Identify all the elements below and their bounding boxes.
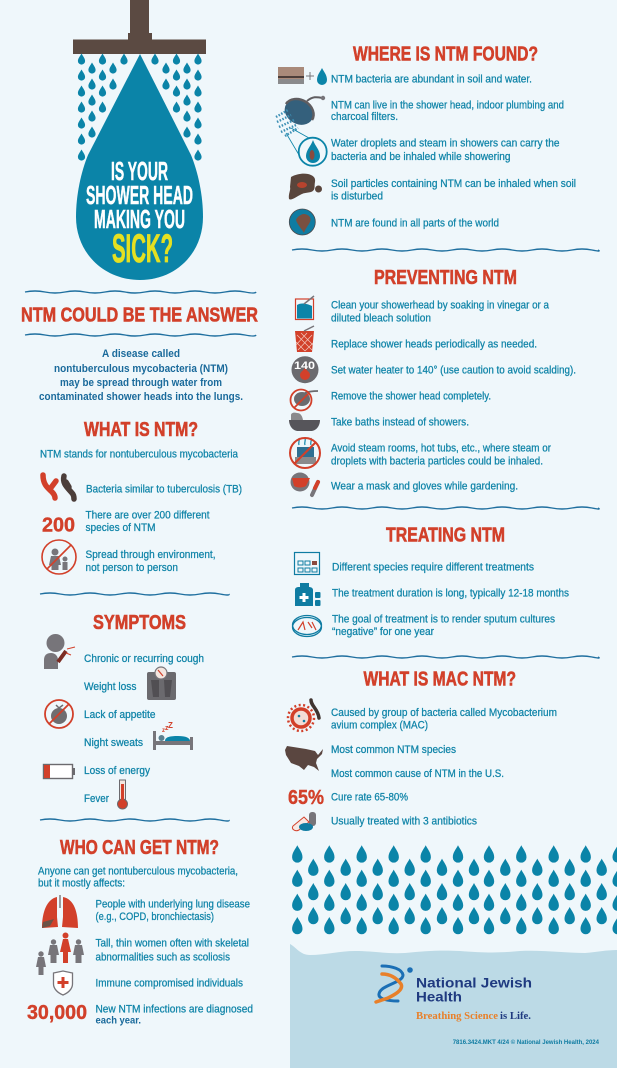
text block: intro: may be spread through water from xyxy=(60,377,222,389)
footer panel xyxy=(290,944,617,1068)
text: tall thin women xyxy=(96,938,249,964)
text: caused by: avium complex (MAC) xyxy=(331,720,428,732)
heading: PREVENTING NTM xyxy=(374,267,517,289)
text: species: Most common NTM species xyxy=(331,744,456,756)
text: bacteria similar: Bacteria similar to tuberculosis (TB) xyxy=(86,484,242,496)
text: spread through environment xyxy=(86,549,216,574)
title: MAKING YOU xyxy=(94,204,185,234)
text: lung disease: People with underlying lung disease xyxy=(96,899,250,911)
panel: preventing NTM xyxy=(289,267,576,495)
heading: TREATING NTM xyxy=(386,525,505,547)
panel: hero shower head xyxy=(73,0,206,280)
text: baths: Take baths instead of showers. xyxy=(331,417,469,429)
text: fever: Fever xyxy=(84,793,109,805)
text: 200 species: species of NTM xyxy=(86,522,156,534)
heading: NTM could be the answer: NTM COULD BE THE ANSWER xyxy=(21,305,258,327)
heading: WHAT IS NTM? xyxy=(84,419,198,441)
text: 200 species: There are over 200 different xyxy=(86,510,210,522)
icon: no shower head xyxy=(290,390,318,410)
icon: bed: Z xyxy=(168,721,173,730)
icon: shower head xyxy=(73,0,206,54)
icon: MAC bacteria xyxy=(288,700,319,731)
icon: no steam room xyxy=(290,438,320,468)
logo: National Jewish Health xyxy=(376,966,532,1022)
text: goal: “negative” for one year xyxy=(332,626,434,638)
text: shower head: charcoal filters. xyxy=(331,111,398,123)
tagline xyxy=(416,1011,531,1022)
text: clean xyxy=(331,300,549,325)
icon: bed xyxy=(153,721,193,750)
text: new infections xyxy=(96,1004,253,1027)
text: steam rooms: Avoid steam rooms, hot tubs, etc., where steam or xyxy=(331,443,551,455)
text: lung disease: (e.g., COPD, bronchiectasis) xyxy=(96,911,214,923)
text: appetite: Lack of appetite xyxy=(84,709,156,721)
text: caused by: Caused by group of bacteria called Mycobacterium xyxy=(331,707,557,719)
text: new infections: New NTM infections are diagnosed xyxy=(96,1004,253,1016)
icon: mask and gloves xyxy=(290,472,318,495)
icon: low battery xyxy=(44,764,75,778)
text block: intro: nontuberculous mycobacteria (NTM) xyxy=(54,363,228,375)
panel: treating NTM xyxy=(292,525,569,638)
falling water droplets xyxy=(78,54,202,161)
panel: who can get NTM xyxy=(27,837,253,1027)
text: soil xyxy=(331,178,576,203)
text: goal xyxy=(332,614,555,638)
text: water heater: Set water heater to 140° (use caution to avoid scalding). xyxy=(331,365,576,377)
text: cough: Chronic or recurring cough xyxy=(84,653,204,665)
text: tall thin women: Tall, thin women often with skeletal xyxy=(96,938,249,950)
text block: intro: A disease called xyxy=(102,348,180,360)
icon: bucket xyxy=(296,296,314,320)
icon: thermometer xyxy=(118,780,128,809)
text: goal: The goal of treatment is to render sputum cultures xyxy=(332,614,555,626)
text: energy: Loss of energy xyxy=(84,765,151,777)
icon: coughing person xyxy=(44,634,75,669)
icon: lungs xyxy=(42,895,78,928)
text: shower head: NTM can live in the shower head, indoor plumbing and xyxy=(331,100,564,112)
logo wordmark: National Jewish xyxy=(416,974,532,990)
text: lung disease xyxy=(96,899,250,923)
icon: petri dish xyxy=(292,616,322,636)
number: 200: 200 xyxy=(42,515,75,537)
text: soil: Soil particles containing NTM can be inhaled when soil xyxy=(331,178,576,190)
text: replace: Replace shower heads periodically as needed. xyxy=(331,339,537,351)
icon: antibiotics xyxy=(292,812,316,831)
icon: 140 degree dial: 140 xyxy=(294,360,315,372)
text: cure rate: Cure rate 65-80% xyxy=(331,792,408,804)
text: caused by xyxy=(331,707,557,732)
title: IS YOUR xyxy=(111,156,168,186)
text: droplets: bacteria and be inhaled while showering xyxy=(331,151,511,163)
icon: soil plus water xyxy=(278,67,327,85)
text: remove: Remove the shower head completely. xyxy=(331,391,491,403)
text: new infections: each year. xyxy=(96,1016,141,1027)
text: mask: Wear a mask and gloves while gardening. xyxy=(331,481,518,493)
number: 65%: 65% xyxy=(288,787,324,809)
text: steam rooms xyxy=(331,443,551,468)
heading: WHAT IS MAC NTM? xyxy=(364,669,516,691)
icon: no apple xyxy=(45,700,73,728)
logo mark xyxy=(376,966,413,1002)
text: clean: Clean your showerhead by soaking in vinegar or a xyxy=(331,300,549,312)
panel: where is NTM found xyxy=(276,44,576,235)
icon: no person-to-person spread xyxy=(42,540,76,574)
icon: trash can xyxy=(295,326,314,352)
water background xyxy=(290,944,617,1068)
icon: bathtub xyxy=(289,413,320,431)
tagline: Breathing Science xyxy=(416,1011,498,1022)
icon: shield xyxy=(54,971,72,995)
text: species: Different species require different treatments xyxy=(332,562,534,574)
panel: what is NTM xyxy=(40,419,242,574)
text: abundant: NTM bacteria are abundant in soil and water. xyxy=(331,74,532,86)
text: clean: diluted bleach solution xyxy=(331,313,431,325)
rain drop pattern xyxy=(292,845,617,934)
text: night sweats: Night sweats xyxy=(84,737,143,749)
text: droplets: Water droplets and steam in showers can carry the xyxy=(331,138,560,150)
icon: droplet magnifier xyxy=(286,128,327,166)
icon: US map xyxy=(285,746,323,771)
text: spread through environment: Spread through environment, xyxy=(86,549,216,561)
icon: globe xyxy=(289,209,315,235)
heading: WHERE IS NTM FOUND? xyxy=(353,44,538,66)
text: anyone: but it mostly affects: xyxy=(38,878,125,890)
text: definition: NTM stands for nontuberculous mycobacteria xyxy=(40,449,238,461)
logo: National Jewish Health: Health xyxy=(416,989,462,1005)
text: anyone xyxy=(38,866,238,890)
text: steam rooms: droplets with bacteria particles could be inhaled. xyxy=(331,456,543,468)
tagline: is Life. xyxy=(500,1011,531,1022)
text: 200 species xyxy=(86,510,210,534)
text: world: NTM are found in all parts of the world xyxy=(331,218,499,230)
icon: scale xyxy=(147,667,176,700)
icon: bed: z xyxy=(162,728,165,734)
icon: shower head and droplets xyxy=(276,94,325,136)
title xyxy=(86,156,193,271)
text: cause: Most common cause of NTM in the U.S. xyxy=(331,768,504,780)
number: 30,000: 30,000 xyxy=(27,1002,87,1024)
large water drop xyxy=(76,54,203,280)
text: droplets xyxy=(331,138,560,163)
text: soil: is disturbed xyxy=(331,191,383,203)
icon: soil clump xyxy=(289,174,322,200)
icon: bed: z xyxy=(165,725,169,732)
heading: SYMPTOMS xyxy=(93,612,186,634)
icon: women xyxy=(36,932,84,975)
icon: bacteria xyxy=(43,475,74,499)
title: SHOWER HEAD xyxy=(86,180,193,210)
heading: WHO CAN GET NTM? xyxy=(60,837,219,859)
icon: medicine bottle xyxy=(295,583,320,606)
icon: calendar xyxy=(294,552,320,574)
panel: symptoms xyxy=(44,612,204,809)
text: immune: Immune compromised individuals xyxy=(96,978,243,990)
text: spread through environment: not person to person xyxy=(86,562,178,574)
icon: 140 degree dial xyxy=(292,356,318,383)
text: tall thin women: abnormalities such as scoliosis xyxy=(96,952,230,964)
text block: intro xyxy=(39,348,243,403)
text: treated: Usually treated with 3 antibiotics xyxy=(331,816,477,828)
text: anyone: Anyone can get nontuberculous mycobacteria, xyxy=(38,866,238,878)
panel: what is MAC NTM xyxy=(285,669,557,831)
text block: intro: contaminated shower heads into the lungs. xyxy=(39,391,243,403)
text: weight loss: Weight loss xyxy=(84,681,136,693)
footer credit: 7816.3424.MKT 4/24 © National Jewish Health, 2024 xyxy=(453,1038,599,1046)
text: duration: The treatment duration is long, typically 12-18 months xyxy=(332,588,569,600)
title: SICK? xyxy=(112,227,173,271)
text: shower head xyxy=(331,100,564,123)
